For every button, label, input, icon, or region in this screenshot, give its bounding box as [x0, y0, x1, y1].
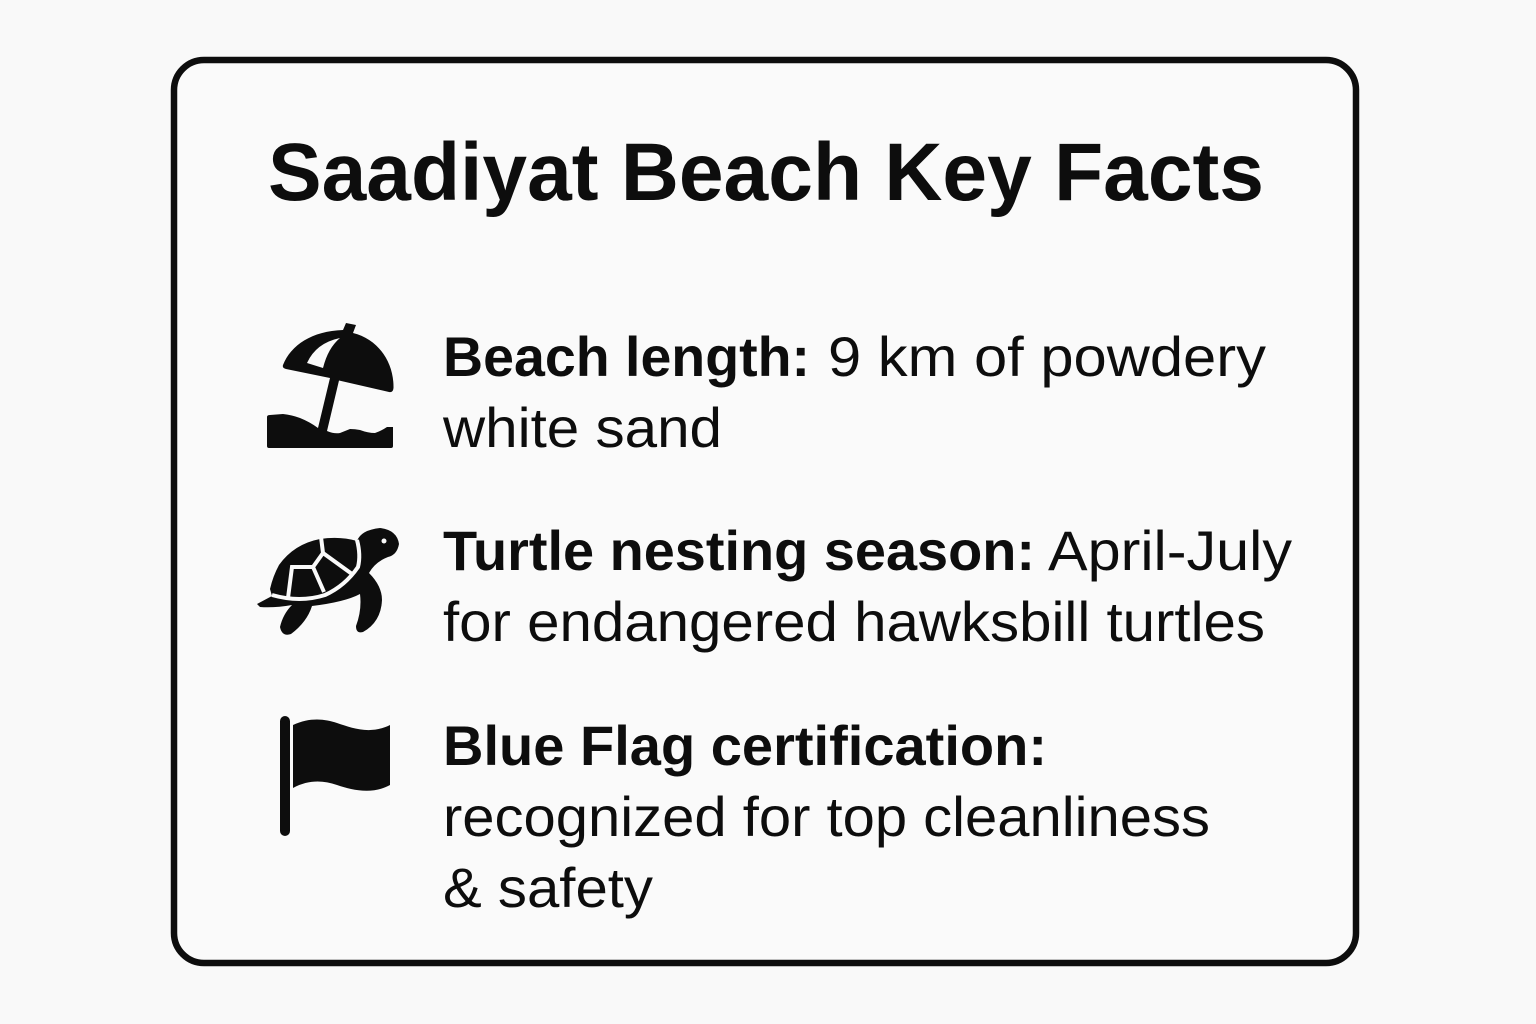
- text: beach length: white sand: [442, 396, 722, 459]
- text: turtle nesting season: April-July: [1048, 519, 1292, 582]
- icon: beach umbrella: [267, 323, 394, 448]
- text: turtle nesting season: [443, 519, 1292, 653]
- text: beach length: Beach length:: [443, 325, 810, 388]
- text: turtle nesting season: Turtle nesting season:: [443, 519, 1035, 582]
- title: Saadiyat Beach Key Facts: [268, 127, 1264, 218]
- fact row: beach length: [267, 323, 1266, 459]
- text: blue flag certification: recognized for top cleanliness: [443, 785, 1210, 848]
- icon: flag: [280, 716, 390, 836]
- text: blue flag certification: & safety: [443, 856, 653, 919]
- text: turtle nesting season: for endangered hawksbill turtles: [443, 590, 1265, 653]
- text: beach length: 9 km of powdery: [828, 325, 1266, 388]
- icon: turtle: [257, 528, 399, 635]
- text: blue flag certification: Blue Flag certification:: [443, 714, 1047, 777]
- fact row: blue flag certification: [280, 714, 1210, 919]
- panel: key facts card: [174, 60, 1356, 963]
- fact row: turtle nesting season: [257, 519, 1292, 653]
- text: beach length: [442, 325, 1266, 459]
- text: blue flag certification: [443, 714, 1210, 919]
